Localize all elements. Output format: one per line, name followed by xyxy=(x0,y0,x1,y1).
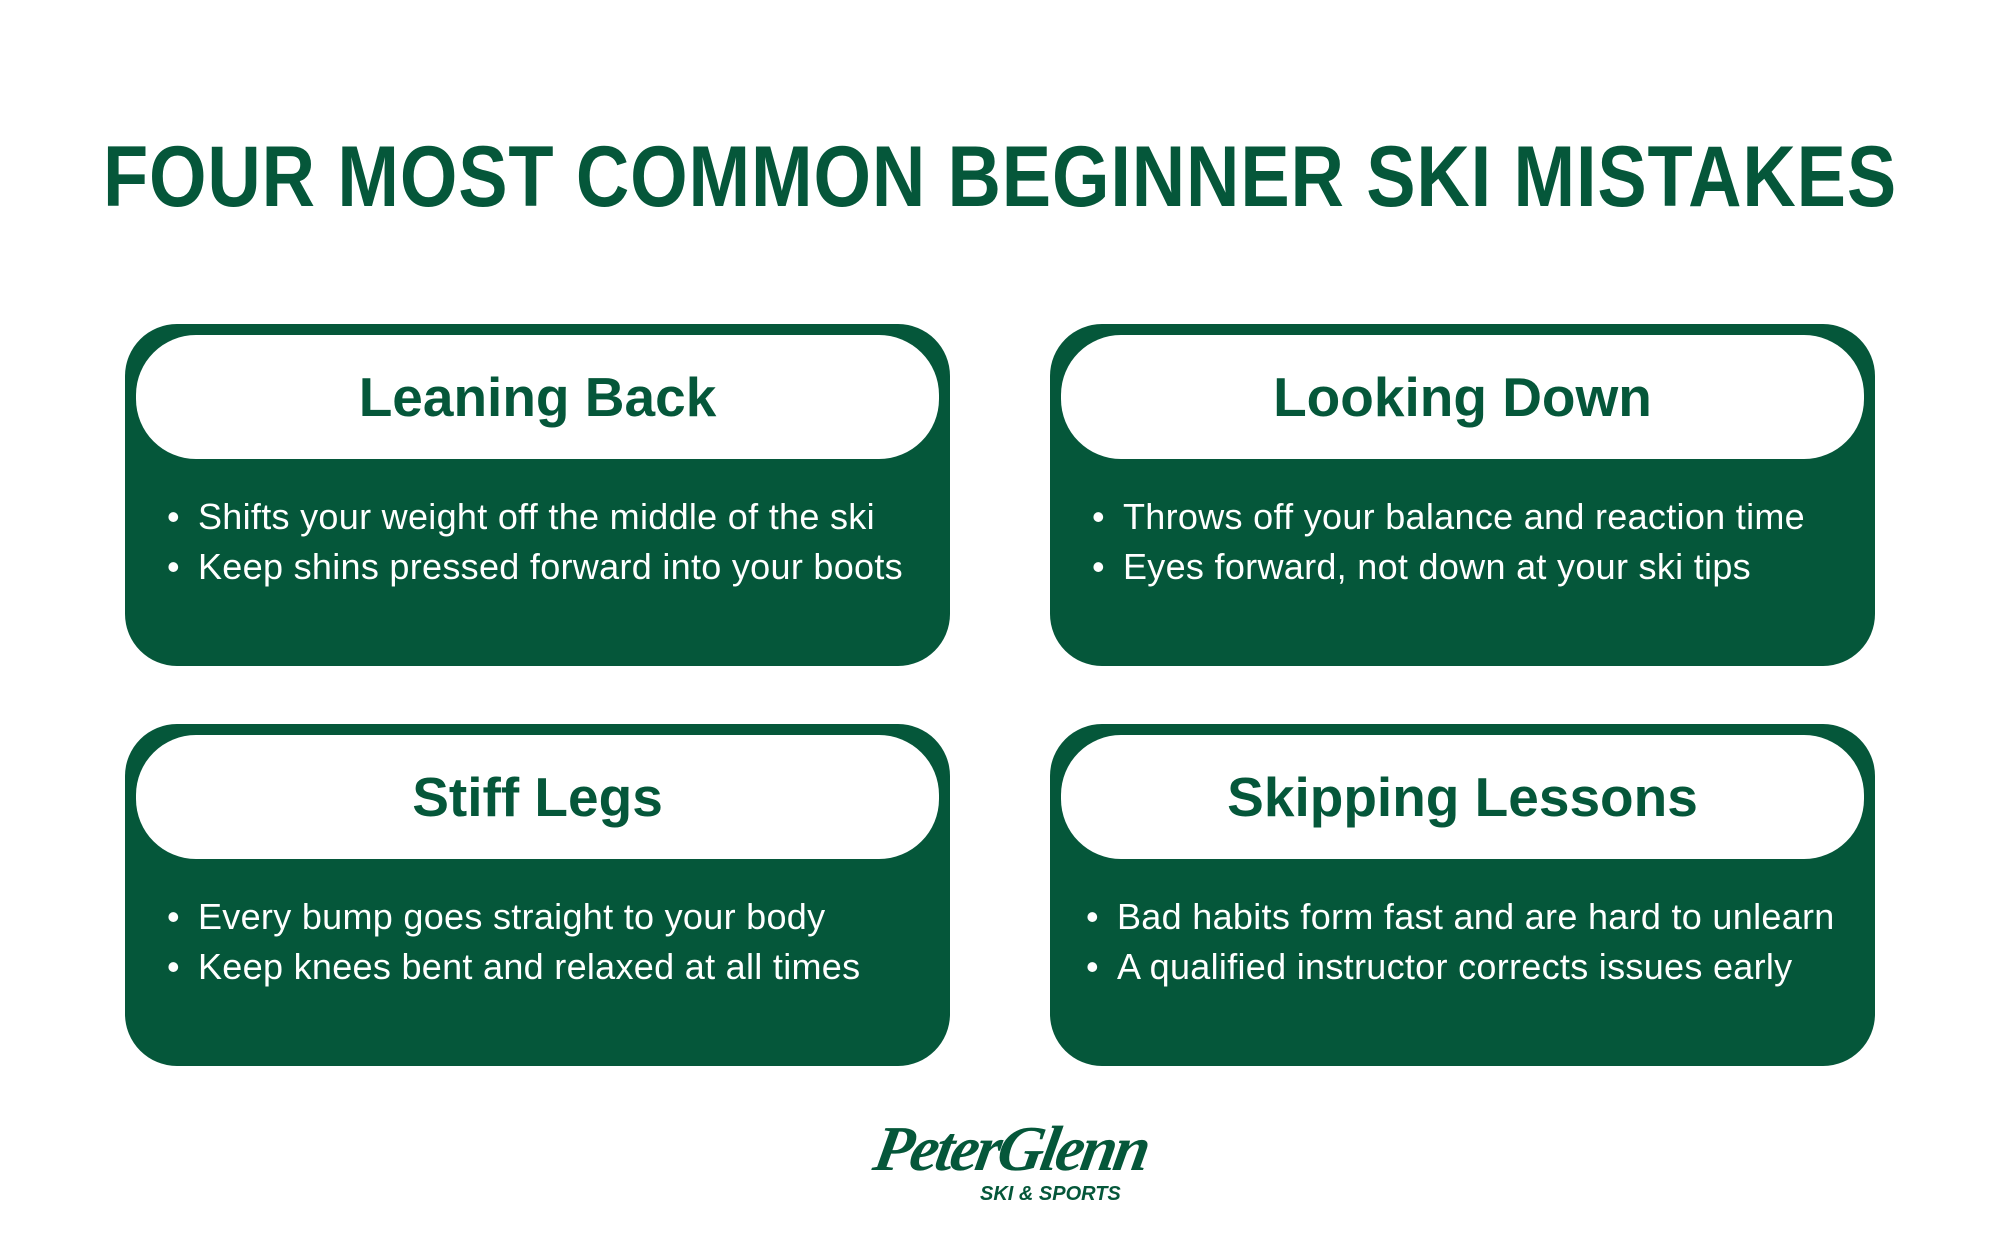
panel: skipping lessons xyxy=(1050,724,1875,1066)
bullets: stiff legs: Every bump goes straight to your body xyxy=(198,896,825,937)
panel: looking down xyxy=(1050,324,1875,666)
bullets: skipping lessons: A qualified instructor corrects issues early xyxy=(1117,946,1792,987)
panel: leaning back xyxy=(125,324,950,666)
bullets: looking down: Throws off your balance and reaction time xyxy=(1123,496,1805,537)
logo: Peter Glenn: PeterGlenn xyxy=(869,1113,1154,1184)
bullets: leaning back: Shifts your weight off the middle of the ski xyxy=(198,496,875,537)
bullets: leaning back xyxy=(168,496,903,587)
heading: looking down xyxy=(1061,335,1864,459)
bullets: skipping lessons: Bad habits form fast and are hard to unlearn xyxy=(1117,896,1835,937)
heading: skipping lessons xyxy=(1061,735,1864,859)
bullets: stiff legs: Keep knees bent and relaxed at all times xyxy=(198,946,860,987)
heading: leaning back: Leaning Back xyxy=(359,366,716,428)
heading: stiff legs xyxy=(136,735,939,859)
panel: stiff legs xyxy=(125,724,950,1066)
heading: skipping lessons: Skipping Lessons xyxy=(1227,766,1698,828)
bullets: stiff legs xyxy=(168,896,860,987)
logo: Peter Glenn: SKI & SPORTS xyxy=(980,1183,1121,1205)
bullets: looking down: Eyes forward, not down at your ski tips xyxy=(1123,546,1751,587)
title: FOUR MOST COMMON BEGINNER SKI MISTAKES xyxy=(103,129,1897,225)
heading: looking down: Looking Down xyxy=(1273,366,1652,428)
heading: stiff legs: Stiff Legs xyxy=(412,766,663,828)
heading: leaning back xyxy=(136,335,939,459)
bullets: looking down xyxy=(1093,496,1805,587)
bullets: leaning back: Keep shins pressed forward into your boots xyxy=(198,546,903,587)
bullets: skipping lessons xyxy=(1087,896,1835,987)
